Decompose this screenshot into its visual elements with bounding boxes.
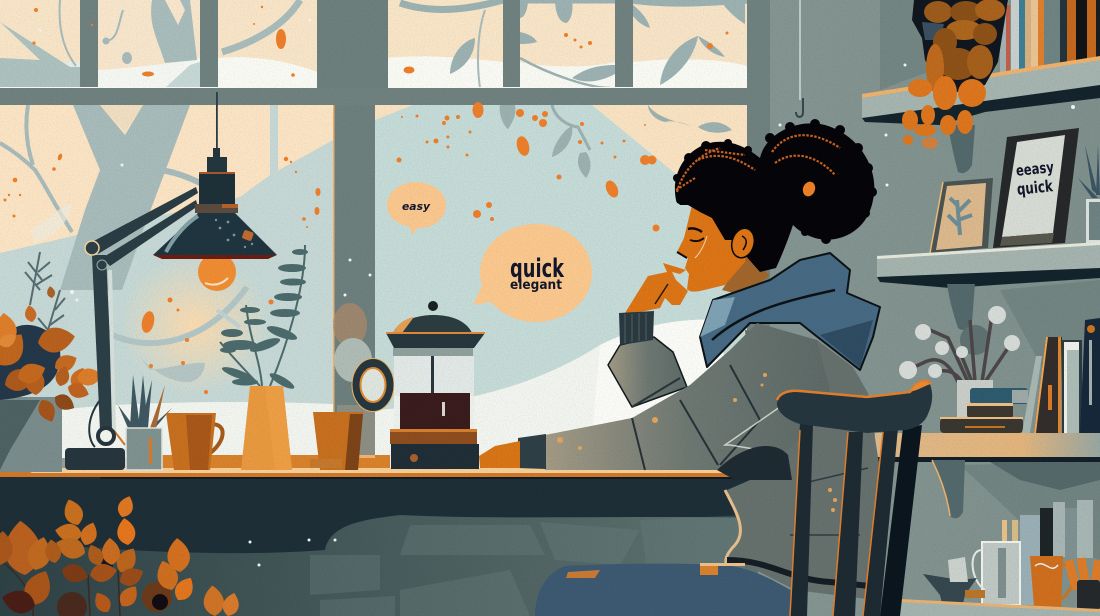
speech bubble: easy: easy [402, 200, 431, 213]
speech bubble: quick elegant: quick [510, 254, 564, 284]
tablet frame: eeasy [1015, 158, 1055, 180]
french press [386, 301, 485, 469]
woman: neck [722, 255, 770, 296]
wall shadows [880, 0, 1100, 560]
tablet frame: quick [1016, 176, 1054, 199]
desk lamp [65, 92, 277, 470]
orange paint flecks [4, 6, 817, 394]
bottom-left autumn leaves [0, 494, 242, 616]
woman: face [677, 205, 750, 292]
flowers in pot and stacked books [899, 306, 1028, 433]
woman: forearm on desk [479, 323, 837, 512]
small framed picture [930, 178, 993, 253]
window top panes [0, 0, 770, 106]
tablet frame [993, 128, 1079, 248]
window central column [317, 0, 388, 458]
fern in vase [220, 245, 308, 470]
mug ring handle [352, 358, 394, 412]
desk top edge [0, 468, 758, 479]
snake plant in square pot [118, 375, 172, 470]
upright books on middle shelf [1022, 318, 1100, 433]
woman: ear [728, 226, 758, 260]
speech bubble: quick elegant [473, 224, 592, 322]
window top mullions and right frame [0, 0, 770, 400]
speech bubble: easy [387, 182, 446, 236]
mug right and coaster [310, 412, 363, 470]
hanging cord [796, 0, 803, 117]
window sill [160, 455, 390, 468]
woman: raised arm [608, 263, 688, 407]
bottom shelf with cups and books [900, 500, 1100, 616]
potted plant left [0, 252, 103, 472]
lower shelf [875, 433, 1100, 518]
woman: torso and jeans [535, 330, 880, 616]
speech bubble: quick elegant: elegant [510, 278, 562, 293]
woman: hood [700, 253, 880, 370]
left window pane [0, 105, 333, 458]
top shelf [862, 0, 1100, 173]
small plant on middle shelf [1078, 145, 1100, 243]
mug left [166, 413, 223, 470]
middle shelf [877, 242, 1100, 330]
woman: hair [673, 119, 877, 272]
hanging plant [902, 0, 1008, 149]
desk front wall [0, 472, 758, 616]
right window pane [375, 105, 750, 470]
chair [777, 381, 932, 616]
